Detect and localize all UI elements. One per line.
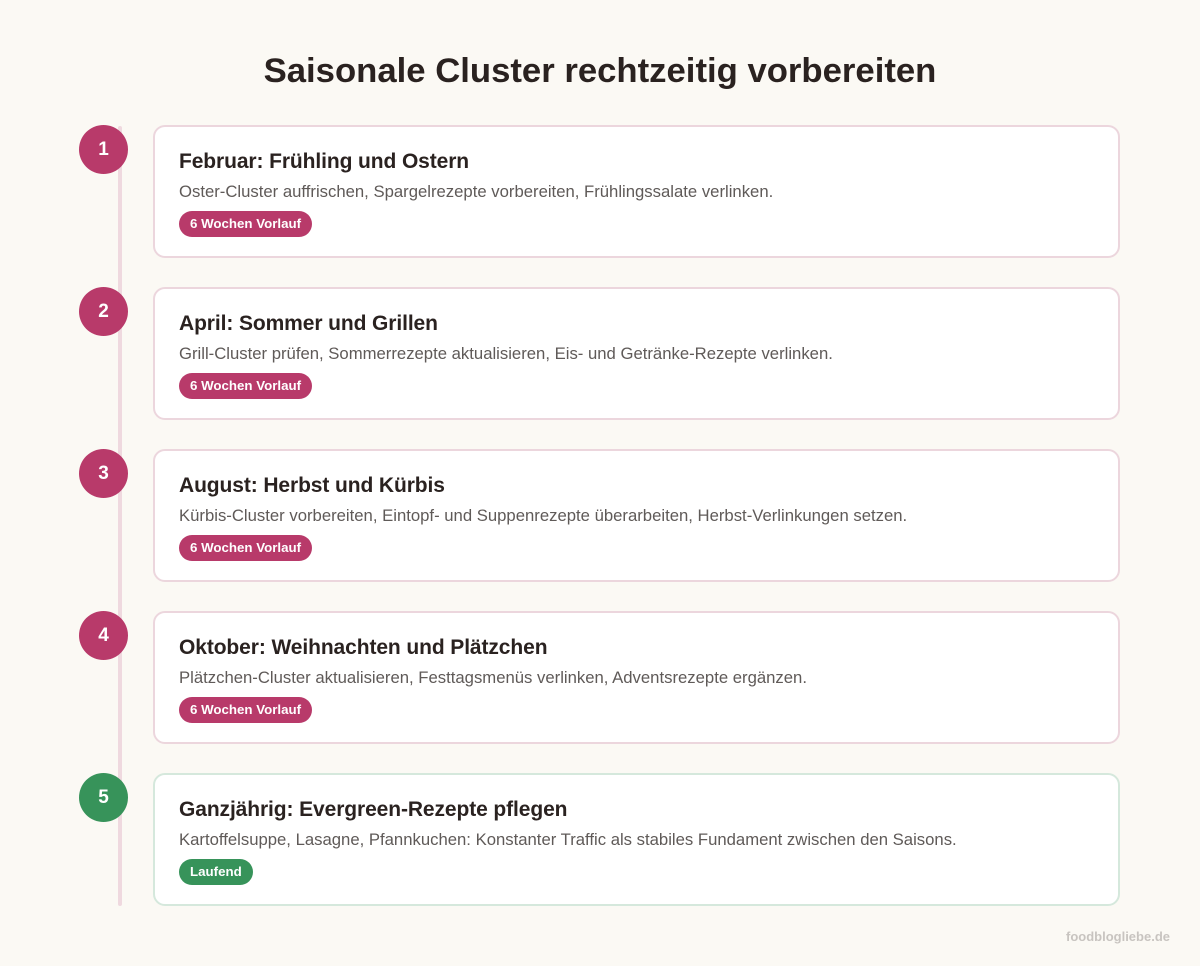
title: Saisonale Cluster rechtzeitig vorbereiten	[264, 52, 936, 90]
card 1	[153, 125, 1120, 258]
badge 4: 6 Wochen Vorlauf	[190, 702, 301, 717]
text 5: Kartoffelsuppe, Lasagne, Pfannkuchen: Konstanter Traffic als stabiles Fundament zwischen den Saisons.	[179, 830, 957, 849]
step 4 marker	[79, 611, 128, 660]
timeline line	[118, 126, 122, 906]
step 4 marker: 4	[98, 625, 109, 646]
badge 4	[179, 697, 312, 723]
heading 4: Oktober: Weihnachten und Plätzchen	[179, 636, 547, 659]
card 3	[153, 449, 1120, 582]
card 5	[153, 773, 1120, 906]
card 2	[153, 287, 1120, 420]
badge 5	[179, 859, 253, 885]
step 3 marker: 3	[98, 463, 109, 484]
card 4	[153, 611, 1120, 744]
step 1 marker	[79, 125, 128, 174]
badge 3	[179, 535, 312, 561]
step 3 marker	[79, 449, 128, 498]
heading 1: Februar: Frühling und Ostern	[179, 150, 469, 173]
step 1 marker: 1	[98, 139, 109, 160]
badge 2: 6 Wochen Vorlauf	[190, 378, 301, 393]
step 2 marker: 2	[98, 301, 109, 322]
text 4: Plätzchen-Cluster aktualisieren, Festtagsmenüs verlinken, Adventsrezepte ergänzen.	[179, 668, 807, 687]
step 2 marker	[79, 287, 128, 336]
badge 3: 6 Wochen Vorlauf	[190, 540, 301, 555]
heading 2: April: Sommer und Grillen	[179, 312, 438, 335]
text 2: Grill-Cluster prüfen, Sommerrezepte aktualisieren, Eis- und Getränke-Rezepte verlinken.	[179, 344, 833, 363]
text 3: Kürbis-Cluster vorbereiten, Eintopf- und Suppenrezepte überarbeiten, Herbst-Verlinkungen setzen.	[179, 506, 907, 525]
heading 5: Ganzjährig: Evergreen-Rezepte pflegen	[179, 798, 567, 821]
step 5 marker: 5	[98, 787, 109, 808]
badge 2	[179, 373, 312, 399]
badge 1	[179, 211, 312, 237]
text 1: Oster-Cluster auffrischen, Spargelrezepte vorbereiten, Frühlingssalate verlinken.	[179, 182, 773, 201]
badge 5: Laufend	[190, 864, 242, 879]
step 5 marker	[79, 773, 128, 822]
footer credit: foodblogliebe.de	[1066, 929, 1170, 944]
badge 1: 6 Wochen Vorlauf	[190, 216, 301, 231]
heading 3: August: Herbst und Kürbis	[179, 474, 445, 497]
